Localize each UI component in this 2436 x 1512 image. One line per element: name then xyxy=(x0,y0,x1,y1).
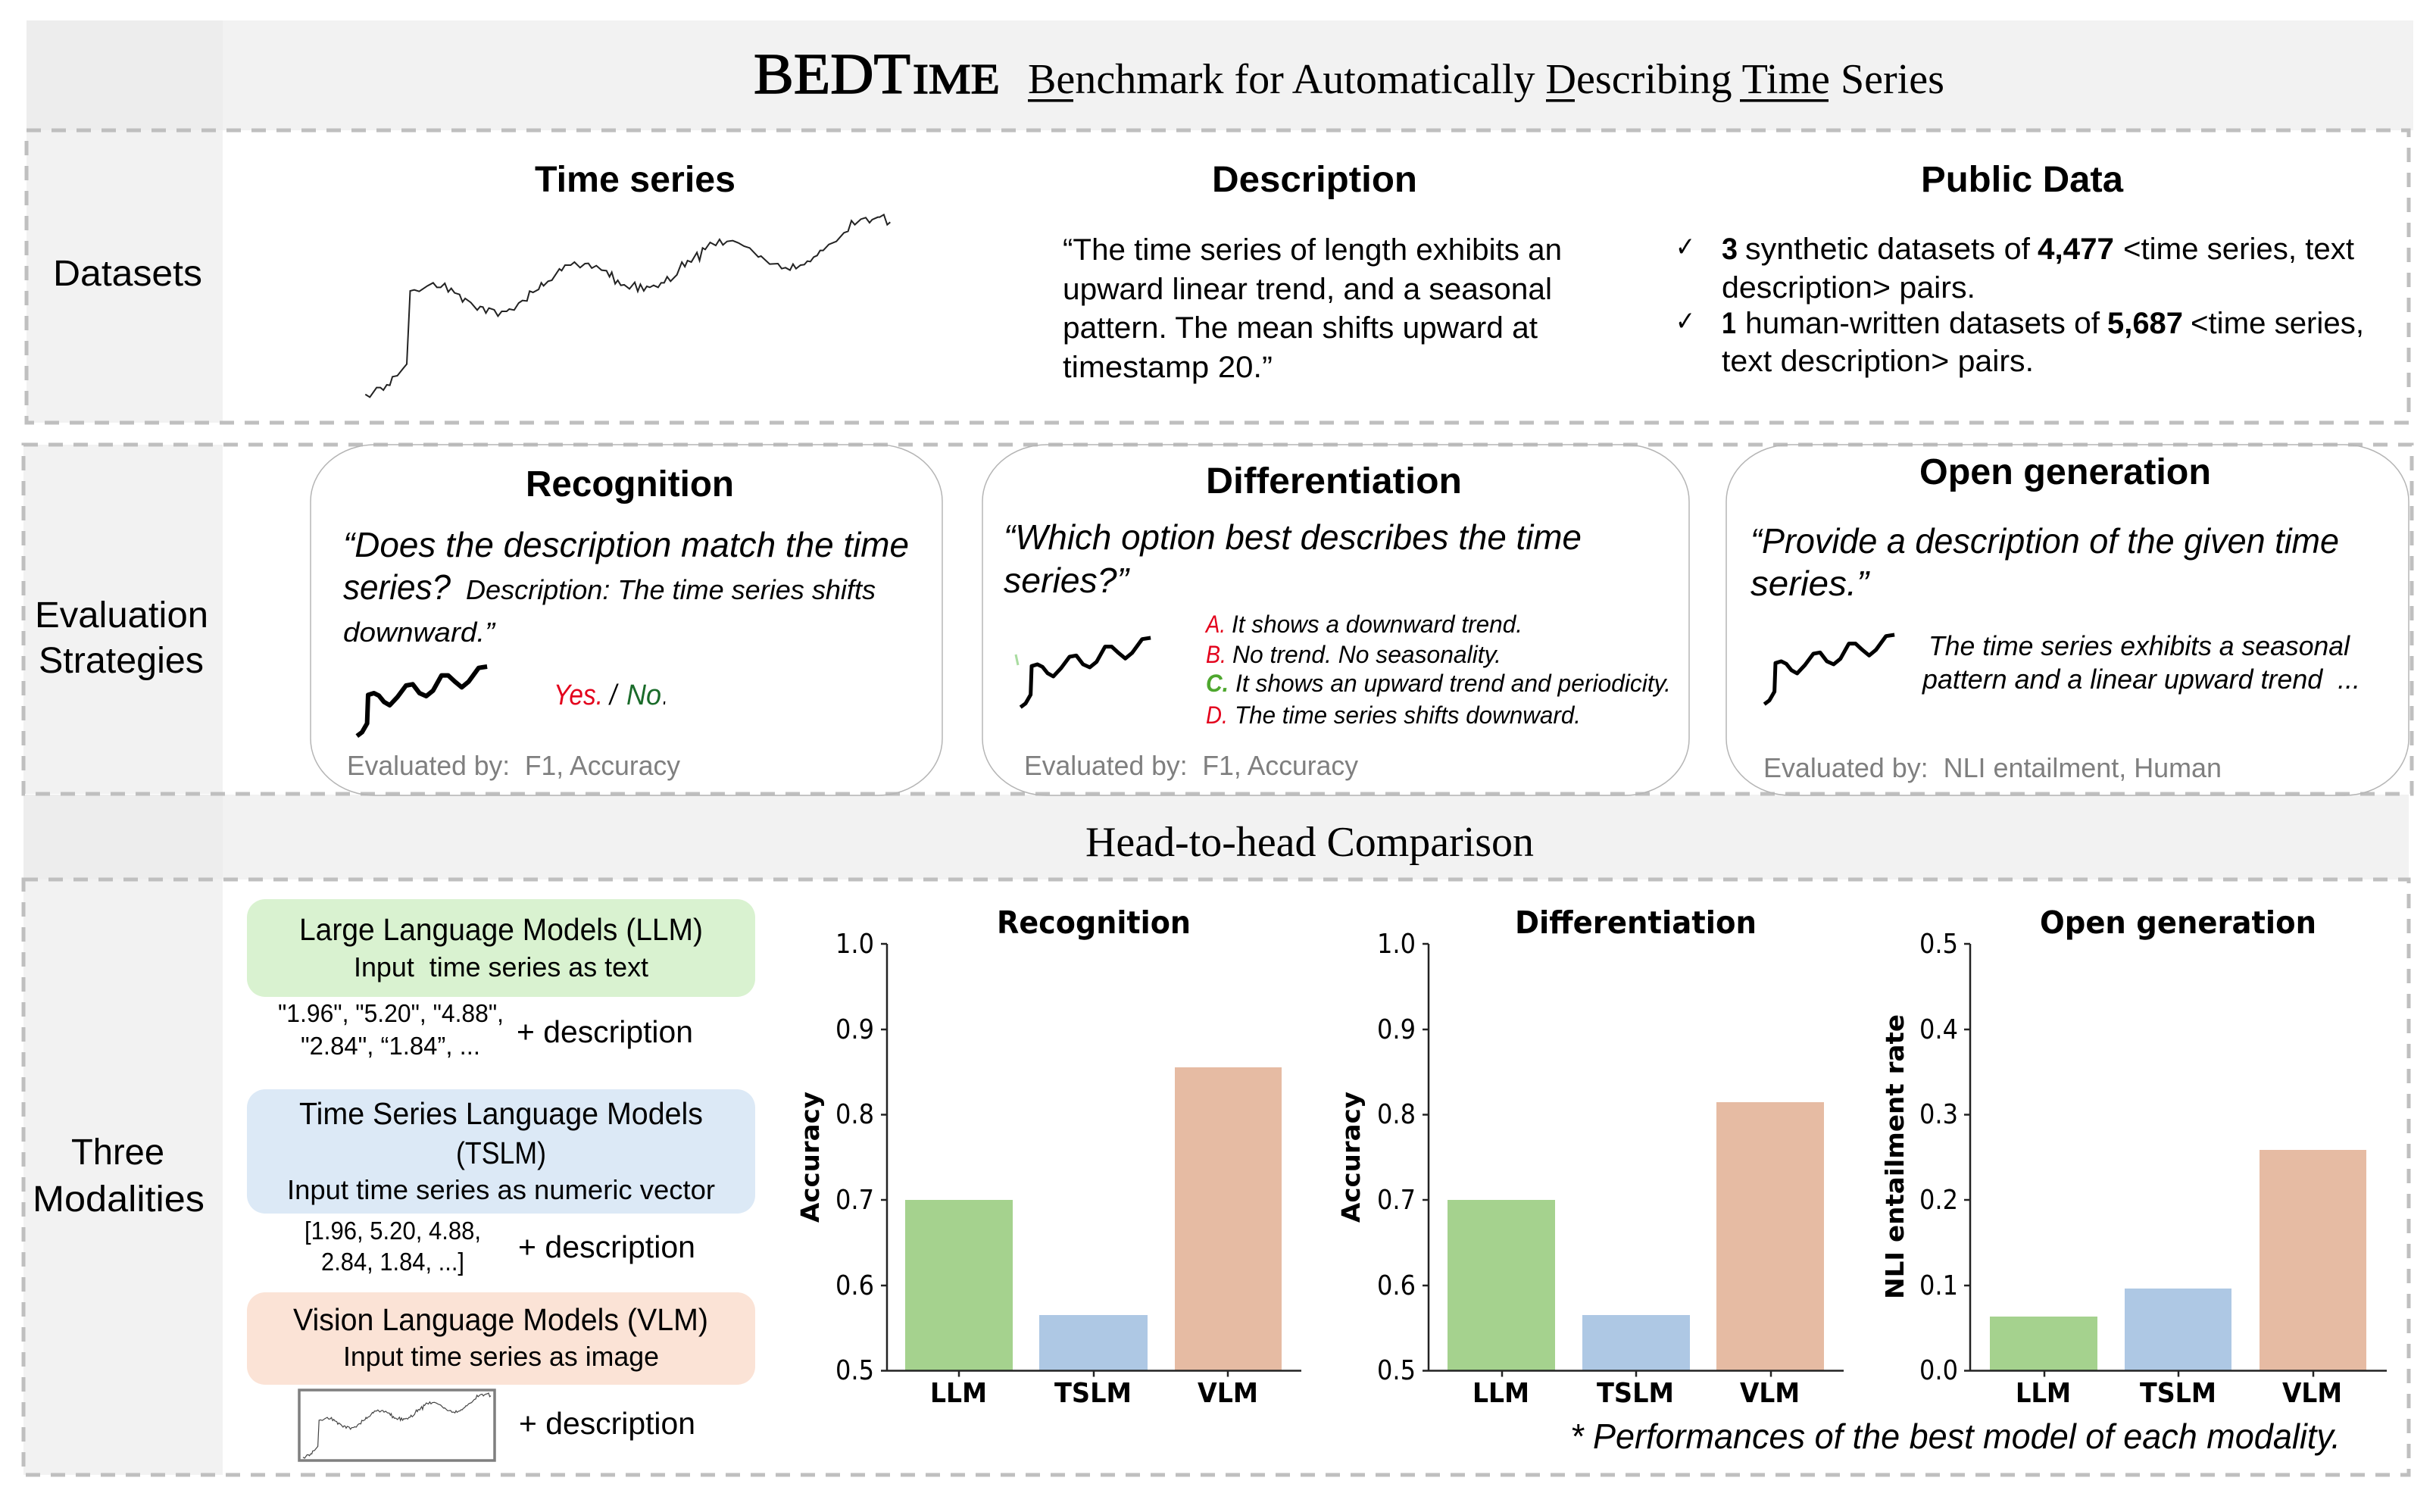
evaluation metric: recognition: Evaluated by: F1, Accuracy xyxy=(347,750,680,781)
y tick labels: 0.0 xyxy=(1919,1355,1958,1386)
text block: public data list: synthetic datasets of xyxy=(1745,233,2031,266)
model box: VLM: Vision Language Models (VLM) xyxy=(293,1302,708,1337)
icon: sparkline xyxy=(357,667,487,736)
panel: evaluation strategies xyxy=(23,445,2412,795)
answer options: multiple choice: B. xyxy=(1206,641,1226,668)
y tick labels: 0.3 xyxy=(1919,1099,1958,1130)
axes xyxy=(881,944,1301,1377)
y tick labels: 0.9 xyxy=(835,1014,874,1045)
bars xyxy=(905,1067,1282,1371)
title: BEDTime logo: BEDT xyxy=(754,42,910,106)
card prompt: recognition xyxy=(343,525,909,648)
section label: datasets: Datasets xyxy=(53,254,202,294)
generated description: The time series exhibits a seasonal xyxy=(1928,630,2350,661)
x tick labels: TSLM xyxy=(1054,1378,1132,1409)
input example: TSLM vector: [1.96, 5.20, 4.88, xyxy=(304,1217,481,1245)
icon: sparkline xyxy=(1764,635,1894,704)
answer options: multiple choice: The time series shifts downward. xyxy=(1235,701,1581,729)
y tick labels xyxy=(1377,929,1416,1386)
heading: public data: Public Data xyxy=(1921,160,2123,200)
bars xyxy=(1448,1102,1824,1371)
input example: TSLM vector: + description xyxy=(518,1229,695,1264)
model box: VLM xyxy=(247,1292,755,1385)
card prompt: differentiation xyxy=(1004,517,1582,600)
generated description xyxy=(1922,630,2360,695)
x tick labels: LLM xyxy=(2016,1378,2071,1409)
heading: time series: Time series xyxy=(535,160,735,200)
x tick labels: LLM xyxy=(1473,1378,1529,1409)
model box: LLM: Input time series as text xyxy=(354,951,648,982)
input example: LLM text: "2.84", “1.84”, ... xyxy=(301,1032,480,1060)
bar chart: open generation xyxy=(1880,904,2387,1409)
x tick labels: VLM xyxy=(1198,1378,1258,1409)
line chart: example time series xyxy=(365,214,890,397)
y tick labels xyxy=(835,929,874,1386)
footnote: * Performances of the best model of each modality. xyxy=(1570,1417,2341,1456)
bar chart: recognition: Recognition xyxy=(997,904,1191,941)
y tick labels: 0.6 xyxy=(835,1270,874,1301)
card prompt: recognition: “Does the description match the time xyxy=(343,525,909,564)
bar chart: differentiation xyxy=(1336,904,1844,1409)
input example: VLM image: + description xyxy=(519,1406,695,1441)
text block: public data list xyxy=(1676,231,2364,378)
card prompt: open generation: “Provide a description of the given time xyxy=(1750,521,2339,561)
y tick labels: 1.0 xyxy=(1377,929,1416,960)
bar chart: open generation: Open generation xyxy=(2040,904,2316,941)
text block: example description xyxy=(1063,233,1562,384)
y axis label: NLI entailment rate: NLI entailment rate xyxy=(1880,1014,1910,1299)
x tick labels: TSLM xyxy=(1597,1378,1674,1409)
card heading: open generation: Open generation xyxy=(1919,452,2211,492)
section label: three modalities xyxy=(33,1132,205,1220)
card prompt: differentiation: series?” xyxy=(1004,561,1131,600)
section label: three modalities: Three xyxy=(71,1132,164,1173)
input example: LLM text: + description xyxy=(517,1014,693,1049)
generated description: pattern and a linear upward trend ... xyxy=(1922,664,2360,695)
answer options: yes or no: . xyxy=(663,679,667,711)
y tick labels xyxy=(1919,929,1958,1386)
heading: head-to-head comparison: Head-to-head Comparison xyxy=(1085,819,1534,866)
card heading: differentiation: Differentiation xyxy=(1206,461,1462,501)
answer options: multiple choice xyxy=(1204,611,1671,729)
text block: public data list: <time series, text xyxy=(2123,233,2354,266)
y tick labels: 0.7 xyxy=(1377,1185,1416,1216)
x tick labels: LLM xyxy=(930,1378,987,1409)
card prompt: open generation: series.” xyxy=(1750,564,1871,603)
axes xyxy=(1964,944,2387,1377)
title xyxy=(754,42,1944,106)
text block: public data list: ✓ xyxy=(1676,231,1695,262)
text block: public data list: 5,687 xyxy=(2107,307,2183,340)
y tick labels: 1.0 xyxy=(835,929,874,960)
section label: evaluation strategies xyxy=(35,595,208,681)
answer options: yes or no: / xyxy=(607,679,619,711)
model box: TSLM: Time Series Language Models xyxy=(299,1096,703,1131)
model box: TSLM xyxy=(247,1089,755,1214)
input example: LLM text xyxy=(278,999,693,1060)
y tick labels: 0.9 xyxy=(1377,1014,1416,1045)
title: BEDTime logo: IME xyxy=(913,56,1000,103)
heading: description: Description xyxy=(1212,160,1417,200)
bar chart: differentiation: Differentiation xyxy=(1515,904,1757,941)
section label: evaluation strategies: Evaluation xyxy=(35,595,208,636)
y tick labels: 0.5 xyxy=(1377,1355,1416,1386)
card prompt: open generation xyxy=(1750,521,2339,603)
answer options: multiple choice: C. xyxy=(1206,670,1229,697)
y tick labels: 0.8 xyxy=(1377,1099,1416,1130)
y tick labels: 0.5 xyxy=(1919,929,1958,960)
model box: TSLM: (TSLM) xyxy=(456,1136,546,1170)
evaluation metric: differentiation: Evaluated by: F1, Accuracy xyxy=(1024,750,1358,781)
answer options: multiple choice: D. xyxy=(1206,701,1228,729)
text block: example description: pattern. The mean shifts upward at xyxy=(1063,311,1538,345)
text block: public data list: <time series, xyxy=(2191,307,2364,340)
y tick labels: 0.2 xyxy=(1919,1185,1958,1216)
mark: green speck xyxy=(1016,654,1018,665)
model box: TSLM: Input time series as numeric vector xyxy=(287,1174,715,1205)
x tick labels xyxy=(930,1378,1258,1409)
card: differentiation xyxy=(982,445,1689,795)
y tick labels: 0.1 xyxy=(1919,1270,1958,1301)
input example: TSLM vector: 2.84, 1.84, ...] xyxy=(321,1248,464,1276)
text block: public data list: ✓ xyxy=(1676,305,1695,336)
x tick labels: VLM xyxy=(2282,1378,2342,1409)
answer options: multiple choice: It shows an upward trend and periodicity. xyxy=(1235,670,1671,697)
x tick labels xyxy=(2016,1378,2342,1409)
card: recognition xyxy=(311,445,942,795)
answer options: yes or no xyxy=(554,679,667,711)
text block: public data list: 3 xyxy=(1722,233,1738,266)
card prompt: recognition: downward.” xyxy=(343,617,496,648)
y tick labels: 0.6 xyxy=(1377,1270,1416,1301)
text block: public data list: 1 xyxy=(1722,307,1736,340)
y tick labels: 0.4 xyxy=(1919,1014,1958,1045)
answer options: multiple choice: A. xyxy=(1204,611,1226,638)
text block: public data list: text description> pairs. xyxy=(1722,345,2034,378)
y tick labels: 0.7 xyxy=(835,1185,874,1216)
icon: sparkline xyxy=(1020,638,1151,708)
model box: LLM: Large Language Models (LLM) xyxy=(299,912,703,947)
title: BEDTime logo xyxy=(754,42,1000,106)
model box: VLM: Input time series as image xyxy=(343,1341,659,1372)
answer options: multiple choice: No trend. No seasonality. xyxy=(1232,641,1501,668)
section label: three modalities: Modalities xyxy=(33,1179,205,1220)
input example: TSLM vector xyxy=(304,1217,695,1276)
card heading: recognition: Recognition xyxy=(526,464,734,505)
title: subtitle: Benchmark for Automatically Describing Time Series xyxy=(1028,56,1944,103)
answer options: yes or no: No xyxy=(626,679,661,711)
x tick labels xyxy=(1473,1378,1800,1409)
answer options: yes or no: Yes. xyxy=(554,679,603,711)
y axis label: accuracy: Accuracy xyxy=(1336,1092,1366,1223)
text block: public data list: human-written datasets of xyxy=(1745,307,2100,340)
model box: LLM xyxy=(247,899,755,997)
panel: datasets xyxy=(27,130,2409,423)
input example: LLM text: "1.96", "5.20", "4.88", xyxy=(278,999,504,1027)
bar chart: recognition xyxy=(795,904,1301,1409)
card prompt: recognition: Description: The time series shifts xyxy=(466,574,876,605)
card prompt: differentiation: “Which option best describes the time xyxy=(1004,517,1582,557)
y tick labels: 0.8 xyxy=(835,1099,874,1130)
card: open generation xyxy=(1726,445,2409,795)
y tick labels: 0.5 xyxy=(835,1355,874,1386)
axes xyxy=(1423,944,1844,1377)
panel: three modalities xyxy=(23,879,2409,1475)
input example: VLM image xyxy=(299,1390,695,1460)
text block: example description: upward linear trend, and a seasonal xyxy=(1063,273,1552,306)
card prompt: recognition: series? xyxy=(343,567,451,607)
x tick labels: TSLM xyxy=(2140,1378,2216,1409)
y axis label: accuracy: Accuracy xyxy=(795,1092,825,1223)
text block: example description: timestamp 20.” xyxy=(1063,351,1273,384)
text block: example description: “The time series of length exhibits an xyxy=(1063,233,1562,267)
evaluation metric: open generation: Evaluated by: NLI entailment, Human xyxy=(1763,752,2222,783)
answer options: multiple choice: It shows a downward trend. xyxy=(1232,611,1522,638)
text block: public data list: description> pairs. xyxy=(1722,271,1975,305)
text block: public data list: 4,477 xyxy=(2038,233,2114,266)
x tick labels: VLM xyxy=(1740,1378,1800,1409)
section label: evaluation strategies: Strategies xyxy=(39,641,204,681)
bars xyxy=(1990,1150,2366,1371)
